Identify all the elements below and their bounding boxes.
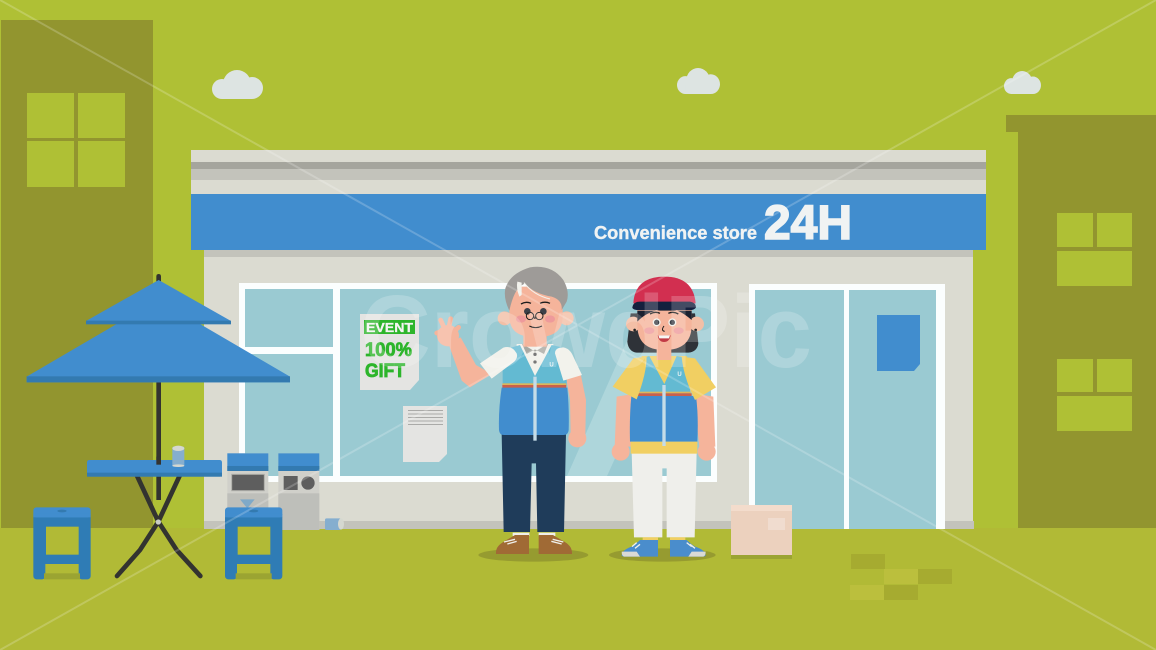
cloud right [1004, 71, 1041, 94]
man face details [516, 315, 526, 323]
ground bricks [850, 554, 952, 600]
man hair [505, 267, 568, 311]
stool left [33, 507, 91, 579]
store sign: 24H [764, 197, 852, 250]
door [749, 284, 945, 529]
event poster [360, 314, 419, 390]
woman face details [644, 327, 654, 334]
paper notice [403, 406, 447, 462]
woman cap [633, 277, 696, 303]
left building [1, 20, 153, 528]
store sign [191, 194, 986, 250]
cardboard box [731, 505, 792, 559]
event poster: 100% [365, 340, 412, 361]
man character [437, 267, 588, 562]
table legs [117, 475, 200, 576]
event poster: EVENT [366, 320, 413, 335]
woman trousers [632, 452, 697, 537]
vending machine right [278, 453, 319, 530]
woman sleeves [613, 357, 716, 400]
shop window [239, 283, 717, 482]
man waving arm [437, 319, 492, 387]
woman shoes [622, 537, 706, 557]
man right arm [566, 374, 586, 447]
cloud left [212, 70, 263, 99]
man shirt [517, 343, 553, 377]
woman character [609, 277, 716, 562]
man shadow [478, 548, 588, 562]
event poster: GIFT [365, 361, 405, 382]
right building [1006, 115, 1156, 528]
parasol and table [27, 274, 290, 576]
woman shirt [637, 356, 691, 397]
woman vest: U [677, 372, 682, 378]
woman vest [630, 356, 698, 454]
man sleeves [480, 347, 582, 381]
man vest: U [549, 363, 554, 369]
woman hair back [627, 313, 698, 353]
can on ground [325, 518, 344, 530]
store roof [191, 150, 986, 194]
cup [172, 446, 184, 467]
man trousers [502, 434, 566, 532]
store sign: Convenience store [594, 223, 757, 243]
door notice [877, 315, 920, 371]
man shoes [496, 533, 572, 554]
table top [87, 457, 222, 477]
watermark text: CrowdPic [360, 274, 812, 389]
parasol pole [156, 274, 161, 500]
man vest [499, 345, 569, 441]
stool right [225, 507, 282, 579]
cloud centre [677, 68, 720, 94]
parasol canopy [27, 280, 290, 382]
woman head [626, 277, 704, 360]
ground [0, 528, 1156, 650]
store building [191, 150, 986, 529]
woman arms [612, 393, 716, 461]
store wall [204, 250, 973, 529]
man head [498, 267, 574, 347]
woman shadow [609, 548, 716, 562]
vending machine left [227, 453, 268, 530]
